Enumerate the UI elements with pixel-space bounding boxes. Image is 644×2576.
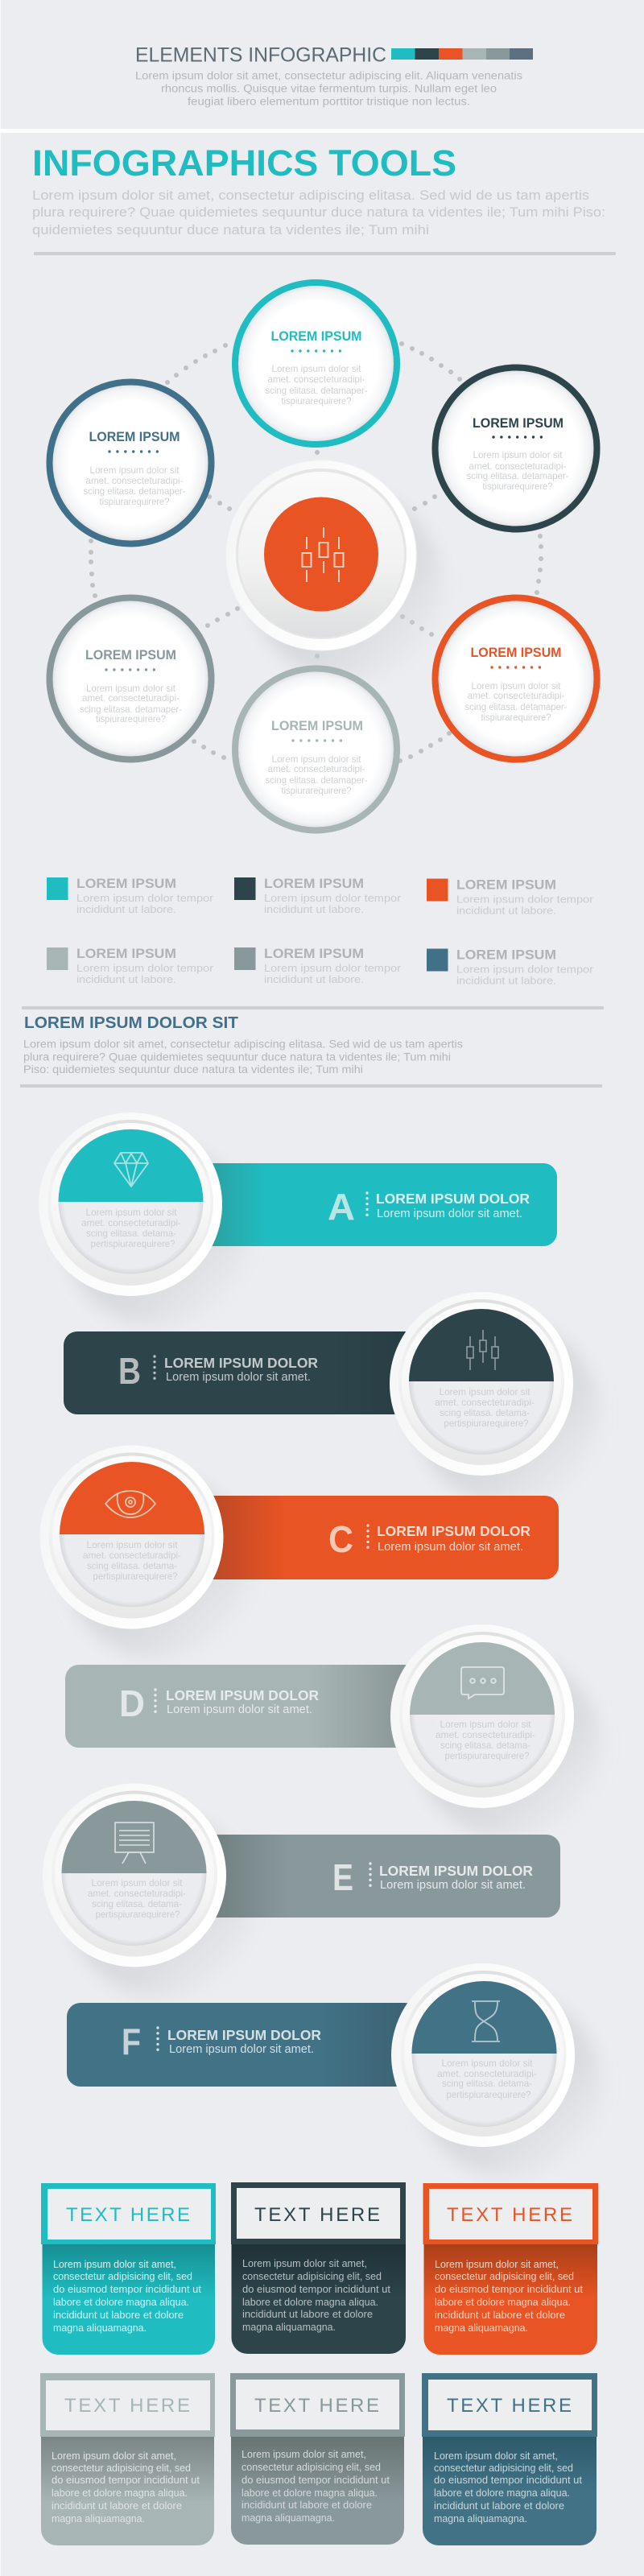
intro paragraph: Lorem ipsum dolor sit amet, consectetur adipiscing elitasa. Sed wid de us tam apertis bbox=[32, 188, 589, 203]
card 1 text: Lorem ipsum dolor sit amet, bbox=[53, 2258, 176, 2270]
label C: C bbox=[328, 1518, 353, 1560]
card 5 text: incididunt ut labore et dolore bbox=[242, 2499, 372, 2511]
node: orange bbox=[435, 597, 597, 760]
hub centre bbox=[226, 460, 416, 650]
bar A bbox=[193, 1163, 557, 1246]
node: teal: scing elitasa. detamaper- bbox=[266, 385, 367, 396]
card 3 text: incididunt ut labore et dolore bbox=[435, 2309, 565, 2321]
sub heading paragraph: Lorem ipsum dolor sit amet, consectetur adipiscing elitasa. Sed wid de us tam apertis bbox=[23, 1037, 463, 1050]
node: orange: tispiurarequirere? bbox=[481, 712, 551, 723]
node: grey: amet. consecteturadipi- bbox=[82, 692, 180, 704]
label D: D bbox=[119, 1682, 145, 1724]
node: dark: scing elitasa. detamaper- bbox=[467, 470, 568, 481]
intro paragraph bbox=[32, 188, 605, 237]
shadow B bbox=[416, 1323, 600, 1506]
node: light grey: tispiurarequirere? bbox=[282, 785, 352, 796]
shadow C bbox=[67, 1476, 250, 1659]
card 6 text: incididunt ut labore et dolore bbox=[434, 2500, 564, 2512]
legend bbox=[47, 877, 594, 987]
node: teal bbox=[235, 283, 397, 444]
label B bbox=[118, 1350, 318, 1392]
legend item 3: LOREM IPSUM bbox=[456, 877, 556, 892]
card 6 text bbox=[434, 2450, 582, 2524]
badge F: pertispiurarequirere? bbox=[446, 2089, 531, 2100]
badge D: pertispiurarequirere? bbox=[444, 1750, 530, 1761]
intro paragraph: plura requirere? Quae quidemietes sequuntur duce natura ta videntes ile; Tum mihi Piso: bbox=[32, 204, 605, 220]
legend item 1: LOREM IPSUM bbox=[76, 877, 176, 891]
badge F: amet. consecteturadipi- bbox=[437, 2068, 537, 2079]
card 2 text: labore et dolore magna aliqua. bbox=[242, 2296, 378, 2308]
header paragraph: Lorem ipsum dolor sit amet, consectetur adipiscing elit. Aliquam venenatis bbox=[135, 69, 522, 82]
card 2 bbox=[231, 2182, 406, 2354]
node: teal: LOREM IPSUM bbox=[270, 328, 362, 344]
node: slate blue bbox=[50, 382, 211, 544]
badge C: Lorem ipsum dolor sit bbox=[87, 1539, 178, 1550]
node: slate blue: LOREM IPSUM bbox=[89, 429, 180, 444]
card 3 text: labore et dolore magna aliqua. bbox=[435, 2296, 571, 2308]
node: slate blue: scing elitasa. detamaper- bbox=[84, 485, 185, 497]
header paragraph: rhoncus mollis. Quisque vitae fermentum turpis. Nullam eget leo bbox=[161, 82, 497, 95]
icon: presentation board bbox=[115, 1823, 154, 1864]
icon: candlesticks bbox=[303, 527, 343, 582]
sub heading block bbox=[23, 1014, 463, 1075]
shadow A bbox=[65, 1143, 249, 1327]
badge D: amet. consecteturadipi- bbox=[436, 1729, 535, 1740]
node: light grey bbox=[235, 668, 397, 831]
card 1 text: incididunt ut labore et dolore bbox=[53, 2309, 184, 2321]
legend item 6: Lorem ipsum dolor tempor bbox=[456, 963, 594, 976]
label B: B bbox=[118, 1350, 141, 1392]
card 6 bbox=[422, 2373, 597, 2545]
card 1 text: labore et dolore magna aliqua. bbox=[53, 2296, 189, 2308]
label E: LOREM IPSUM DOLOR bbox=[379, 1863, 533, 1879]
legend item 1: Lorem ipsum dolor tempor bbox=[76, 892, 214, 904]
card 3 text bbox=[435, 2258, 583, 2334]
badge B bbox=[390, 1292, 573, 1476]
legend item 6: LOREM IPSUM bbox=[456, 948, 556, 963]
sub heading paragraph bbox=[23, 1037, 463, 1075]
header paragraph: feugiat libero elementum porttitor tristique non lectus. bbox=[188, 95, 470, 108]
label E: Lorem ipsum dolor sit amet. bbox=[380, 1878, 526, 1892]
badge A: amet. consecteturadipi- bbox=[81, 1217, 181, 1228]
card 2 text: magna aliquamagna. bbox=[242, 2321, 336, 2333]
step A bbox=[39, 1113, 557, 1296]
dotted connectors bbox=[91, 344, 541, 761]
node: orange: Lorem ipsum dolor sit bbox=[472, 680, 561, 691]
badge E: amet. consecteturadipi- bbox=[88, 1888, 186, 1899]
label A: A bbox=[328, 1186, 355, 1228]
card 5 text: do eiusmod tempor incididunt ut bbox=[242, 2474, 390, 2486]
step F bbox=[67, 1963, 575, 2147]
label D bbox=[119, 1682, 319, 1724]
badge A: pertispiurarequirere? bbox=[90, 1238, 175, 1249]
label B: LOREM IPSUM DOLOR bbox=[164, 1355, 318, 1371]
badge F bbox=[391, 1963, 575, 2147]
card 6 text: do eiusmod tempor incididunt ut bbox=[434, 2474, 582, 2486]
colour swatch strip bbox=[391, 48, 533, 60]
node: light grey: LOREM IPSUM bbox=[271, 718, 363, 733]
label F: F bbox=[122, 2021, 141, 2062]
legend item 4: incididunt ut labore. bbox=[76, 973, 176, 985]
badge F: Lorem ipsum dolor sit bbox=[441, 2058, 533, 2069]
legend item 1: incididunt ut labore. bbox=[76, 903, 176, 915]
badge B: pertispiurarequirere? bbox=[444, 1418, 529, 1429]
legend item 3 bbox=[427, 877, 594, 916]
badge A bbox=[39, 1113, 222, 1296]
label F: LOREM IPSUM DOLOR bbox=[167, 2027, 321, 2043]
badge A: Lorem ipsum dolor sit bbox=[85, 1207, 177, 1218]
card 1 bbox=[41, 2183, 216, 2355]
label A: Lorem ipsum dolor sit amet. bbox=[377, 1207, 522, 1220]
step C bbox=[40, 1446, 559, 1629]
step B bbox=[64, 1292, 573, 1476]
badge E: pertispiurarequirere? bbox=[95, 1909, 180, 1920]
badge B: scing elitasa. detama- bbox=[440, 1407, 530, 1418]
card 6 text: consectetur adipisicing elit, sed bbox=[434, 2462, 573, 2474]
label E: E bbox=[332, 1856, 353, 1898]
icon: eye bbox=[105, 1491, 155, 1517]
header title: ELEMENTS INFOGRAPHIC bbox=[135, 43, 386, 66]
bar D bbox=[65, 1665, 419, 1748]
label A: LOREM IPSUM DOLOR bbox=[376, 1191, 530, 1207]
legend item 1 bbox=[47, 877, 214, 915]
card 3 heading: TEXT HERE bbox=[447, 2204, 572, 2226]
badge E bbox=[43, 1784, 226, 1967]
card 3 text: consectetur adipisicing elit, sed bbox=[435, 2270, 574, 2282]
card 6 heading: TEXT HERE bbox=[447, 2395, 572, 2417]
card 2 text: incididunt ut labore et dolore bbox=[242, 2308, 373, 2320]
card 2 heading: TEXT HERE bbox=[254, 2204, 380, 2226]
legend item 4 bbox=[47, 947, 214, 985]
node: teal: Lorem ipsum dolor sit bbox=[272, 363, 361, 374]
legend item 2: LOREM IPSUM bbox=[264, 877, 364, 891]
legend item 2 bbox=[234, 877, 402, 915]
legend item 2: Lorem ipsum dolor tempor bbox=[264, 892, 402, 904]
header paragraph bbox=[135, 69, 522, 108]
node: grey: tispiurarequirere? bbox=[96, 713, 166, 724]
step D bbox=[65, 1624, 574, 1808]
legend item 6: incididunt ut labore. bbox=[456, 974, 556, 987]
card 1 text: do eiusmod tempor incididunt ut bbox=[53, 2283, 201, 2295]
node: dark: Lorem ipsum dolor sit bbox=[473, 449, 563, 460]
icon: chat bubble bbox=[461, 1667, 504, 1699]
card 5 text: magna aliquamagna. bbox=[242, 2512, 335, 2524]
card 4 heading: TEXT HERE bbox=[64, 2395, 190, 2417]
badge B: amet. consecteturadipi- bbox=[435, 1397, 535, 1408]
hub diagram bbox=[50, 283, 597, 831]
legend item 2: incididunt ut labore. bbox=[264, 903, 364, 915]
label C: LOREM IPSUM DOLOR bbox=[377, 1523, 530, 1539]
card 5 text: Lorem ipsum dolor sit amet, bbox=[242, 2448, 366, 2460]
card 1 text: magna aliquamagna. bbox=[53, 2322, 147, 2334]
card 6 text: magna aliquamagna. bbox=[434, 2512, 527, 2524]
card 3 text: Lorem ipsum dolor sit amet, bbox=[435, 2258, 559, 2270]
badge C: amet. consecteturadipi- bbox=[83, 1550, 181, 1561]
badge B: Lorem ipsum dolor sit bbox=[440, 1386, 530, 1397]
shadow D bbox=[417, 1655, 601, 1839]
legend item 5: Lorem ipsum dolor tempor bbox=[264, 962, 402, 974]
node: teal: amet. consecteturadipi- bbox=[267, 374, 365, 385]
card 5 text bbox=[242, 2448, 390, 2524]
badge D bbox=[390, 1624, 574, 1808]
card 2 text: consectetur adipisicing elit, sed bbox=[242, 2270, 382, 2282]
node: light grey: Lorem ipsum dolor sit bbox=[272, 753, 361, 765]
badge A: scing elitasa. detama- bbox=[86, 1228, 176, 1239]
badge D: Lorem ipsum dolor sit bbox=[440, 1719, 531, 1730]
hub shadow bbox=[252, 491, 442, 681]
label B: Lorem ipsum dolor sit amet. bbox=[166, 1370, 311, 1384]
shadow F bbox=[418, 1994, 601, 2178]
card 4 text: magna aliquamagna. bbox=[52, 2512, 145, 2524]
node: light grey: amet. consecteturadipi- bbox=[267, 763, 365, 774]
badge E: Lorem ipsum dolor sit bbox=[92, 1877, 183, 1889]
white band divider bbox=[0, 129, 644, 133]
badge E: scing elitasa. detama- bbox=[92, 1898, 182, 1909]
node: dark: tispiurarequirere? bbox=[483, 481, 553, 492]
node: light grey: scing elitasa. detamaper- bbox=[266, 774, 367, 786]
step E bbox=[43, 1784, 560, 1967]
bar B bbox=[64, 1331, 419, 1414]
badge F: scing elitasa. detama- bbox=[442, 2078, 532, 2089]
badge C: pertispiurarequirere? bbox=[93, 1571, 178, 1582]
legend item 3: incididunt ut labore. bbox=[456, 905, 556, 916]
card 5 bbox=[230, 2373, 405, 2545]
label F bbox=[122, 2021, 321, 2062]
legend item 6 bbox=[427, 948, 594, 987]
card 2 text: Lorem ipsum dolor sit amet, bbox=[242, 2257, 367, 2269]
sub heading paragraph: Piso: quidemietes sequuntur duce natura ta videntes ile; Tum mihi bbox=[23, 1063, 363, 1075]
card 1 heading: TEXT HERE bbox=[66, 2204, 190, 2226]
label E bbox=[332, 1856, 533, 1898]
card 4 text: labore et dolore magna aliqua. bbox=[52, 2487, 188, 2499]
bar C bbox=[195, 1496, 559, 1579]
card 4 text: incididunt ut labore et dolore bbox=[52, 2500, 182, 2512]
card 1 text: consectetur adipisicing elit, sed bbox=[53, 2270, 192, 2282]
card 4 text: do eiusmod tempor incididunt ut bbox=[52, 2474, 200, 2486]
card 2 text bbox=[242, 2257, 390, 2333]
node: slate blue: tispiurarequirere? bbox=[100, 496, 170, 507]
legend item 4: Lorem ipsum dolor tempor bbox=[76, 962, 214, 974]
node: dark bbox=[435, 367, 597, 530]
card 3 text: do eiusmod tempor incididunt ut bbox=[435, 2283, 583, 2295]
card 1 text bbox=[53, 2258, 201, 2334]
label C bbox=[328, 1518, 530, 1560]
icon: hourglass bbox=[472, 2001, 500, 2041]
section heading block bbox=[32, 142, 605, 237]
node: slate blue: amet. consecteturadipi- bbox=[85, 475, 184, 486]
main title: INFOGRAPHICS TOOLS bbox=[32, 142, 456, 184]
card 4 text: consectetur adipisicing elit, sed bbox=[52, 2462, 191, 2474]
label F: Lorem ipsum dolor sit amet. bbox=[169, 2042, 314, 2056]
label A bbox=[328, 1186, 530, 1228]
legend item 3: Lorem ipsum dolor tempor bbox=[456, 894, 594, 905]
icon: candlesticks bbox=[467, 1330, 498, 1370]
label D: Lorem ipsum dolor sit amet. bbox=[167, 1703, 312, 1716]
bar F bbox=[67, 2003, 419, 2087]
node: dark: LOREM IPSUM bbox=[473, 415, 564, 431]
node: slate blue: Lorem ipsum dolor sit bbox=[90, 464, 180, 476]
icon: diamond bbox=[114, 1153, 148, 1187]
badge C bbox=[40, 1446, 224, 1629]
badge D: scing elitasa. detama- bbox=[440, 1740, 530, 1751]
card 5 text: labore et dolore magna aliqua. bbox=[242, 2487, 378, 2499]
badge C: scing elitasa. detama- bbox=[87, 1560, 177, 1571]
header block bbox=[135, 43, 533, 108]
card 4 text bbox=[52, 2450, 200, 2524]
node: orange: LOREM IPSUM bbox=[470, 645, 562, 660]
node: grey: LOREM IPSUM bbox=[85, 647, 176, 663]
bar E bbox=[197, 1835, 560, 1918]
legend item 5: incididunt ut labore. bbox=[264, 973, 364, 985]
card 3 bbox=[423, 2183, 598, 2355]
card 4 bbox=[40, 2373, 215, 2545]
card 3 text: magna aliquamagna. bbox=[435, 2322, 528, 2334]
node: grey bbox=[50, 597, 211, 760]
card 2 text: do eiusmod tempor incididunt ut bbox=[242, 2283, 390, 2295]
label D: LOREM IPSUM DOLOR bbox=[166, 1687, 319, 1703]
node: grey: Lorem ipsum dolor sit bbox=[86, 683, 176, 694]
card 4 text: Lorem ipsum dolor sit amet, bbox=[52, 2450, 176, 2462]
node: dark: amet. consecteturadipi- bbox=[469, 460, 567, 472]
label C: Lorem ipsum dolor sit amet. bbox=[378, 1540, 523, 1554]
card 5 text: consectetur adipisicing elit, sed bbox=[242, 2461, 381, 2473]
sub heading paragraph: plura requirere? Quae quidemietes sequuntur duce natura ta videntes ile; Tum mihi bbox=[23, 1050, 451, 1063]
node: orange: scing elitasa. detamaper- bbox=[465, 701, 567, 712]
legend item 4: LOREM IPSUM bbox=[76, 947, 176, 961]
card 5 heading: TEXT HERE bbox=[254, 2395, 379, 2417]
shadow E bbox=[69, 1814, 253, 1997]
legend item 5: LOREM IPSUM bbox=[264, 947, 364, 961]
sub heading: LOREM IPSUM DOLOR SIT bbox=[24, 1014, 238, 1032]
node: orange: amet. consecteturadipi- bbox=[467, 690, 565, 701]
node: grey: scing elitasa. detamaper- bbox=[80, 704, 182, 715]
card 6 text: Lorem ipsum dolor sit amet, bbox=[434, 2450, 558, 2462]
legend item 5 bbox=[234, 947, 402, 985]
intro paragraph: quidemietes sequuntur duce natura ta videntes ile; Tum mihi bbox=[32, 222, 429, 237]
card 6 text: labore et dolore magna aliqua. bbox=[434, 2487, 570, 2499]
node: teal: tispiurarequirere? bbox=[282, 395, 352, 407]
